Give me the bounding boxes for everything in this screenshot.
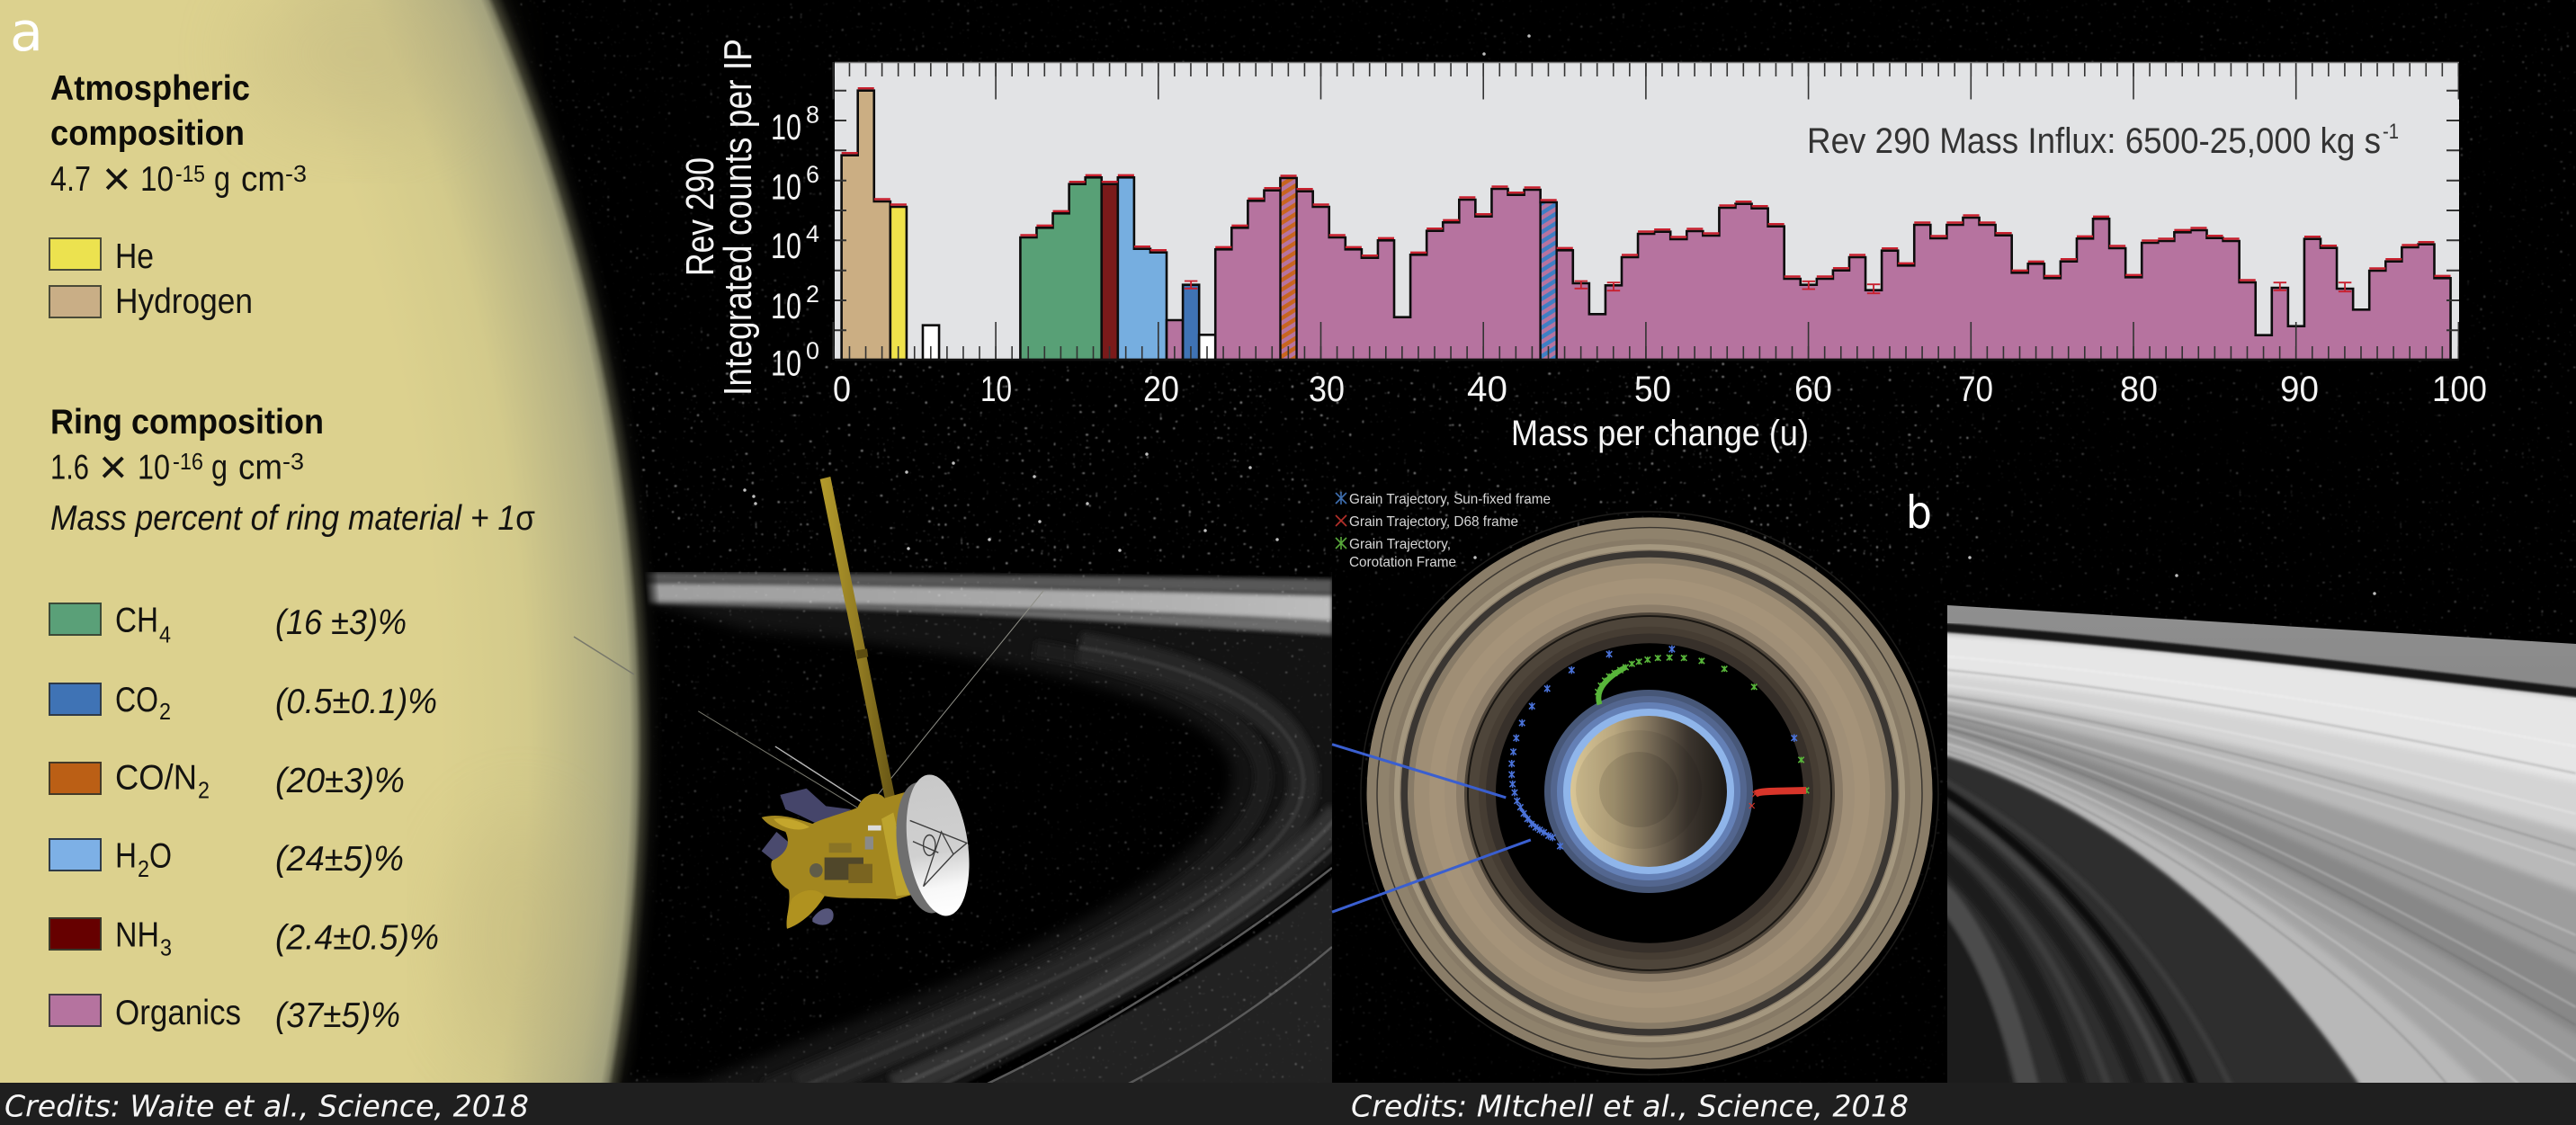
heading: ring composition bbox=[50, 403, 535, 538]
Cassini division bbox=[1934, 627, 2576, 694]
legend: grain trajectories: Grain Trajectory, Sun-fixed frame bbox=[1349, 492, 1551, 507]
CO/N2 row: CO/N bbox=[115, 759, 197, 797]
concentric rings bbox=[1361, 512, 1938, 1075]
y axis labels: 6 bbox=[806, 161, 819, 188]
NH3 row: NH bbox=[115, 916, 159, 955]
NH3 row: 3 bbox=[160, 934, 172, 961]
legend: grain trajectories: Grain Trajectory, D68 frame bbox=[1349, 514, 1518, 530]
Organics row: (37±5)% bbox=[275, 996, 400, 1035]
CH4 row bbox=[49, 601, 407, 648]
heading: ring composition: 1.6 bbox=[50, 449, 89, 487]
chart: Rev 290 mass spectrum bbox=[678, 39, 2487, 453]
x axis labels: 100 bbox=[2432, 370, 2487, 409]
outer lighter ring sector bbox=[988, 865, 1332, 1084]
y axis labels: 4 bbox=[806, 220, 819, 247]
CO2 row: CO bbox=[115, 681, 158, 719]
heading: atmospheric composition: × bbox=[103, 152, 131, 206]
plot background bbox=[835, 62, 2459, 360]
high-gain antenna dish bbox=[889, 779, 961, 917]
y axis labels: 10 bbox=[771, 344, 801, 384]
CO2 row: 2 bbox=[159, 698, 171, 725]
x axis labels bbox=[833, 370, 2487, 453]
y axis labels: 8 bbox=[806, 102, 819, 129]
equipment details bbox=[809, 826, 881, 883]
y axis labels: 10 bbox=[771, 287, 801, 326]
heading: atmospheric composition: 4.7 bbox=[50, 160, 91, 199]
annotation: mass influx: -1 bbox=[2383, 120, 2399, 144]
y axis labels: 10 bbox=[771, 108, 801, 147]
annotation: mass influx: Rev 290 Mass Influx: 6500-25,000 kg s bbox=[1807, 121, 2381, 161]
black ring interior bbox=[621, 594, 1232, 1084]
ring stripes bbox=[765, 647, 1340, 1088]
legend: grain trajectories: Grain Trajectory, bbox=[1349, 537, 1451, 552]
x axis labels: Mass per change (u) bbox=[1511, 414, 1809, 453]
x axis labels: 0 bbox=[833, 370, 851, 409]
axis ticks bbox=[833, 63, 2459, 360]
CH4 row: 4 bbox=[159, 621, 171, 648]
heading: atmospheric composition: 10 bbox=[140, 160, 174, 199]
Organics row: Organics bbox=[115, 994, 241, 1032]
heading: ring composition: g bbox=[211, 449, 228, 487]
x axis labels: 80 bbox=[2120, 370, 2158, 409]
heading: ring composition: cm bbox=[238, 449, 282, 487]
heading: atmospheric composition: -3 bbox=[285, 160, 307, 187]
heading: ring composition: Ring composition bbox=[50, 403, 324, 442]
CO/N2 row: 2 bbox=[198, 777, 210, 804]
heading: atmospheric composition: cm bbox=[241, 160, 285, 199]
hatched mixed bars bbox=[1281, 178, 1557, 360]
H2O row: (24±5)% bbox=[275, 840, 404, 879]
H2O row bbox=[49, 836, 404, 882]
spacecraft: Cassini bbox=[699, 477, 1043, 929]
x axis labels: 40 bbox=[1467, 370, 1507, 409]
heading: ring composition: -16 bbox=[173, 448, 203, 475]
x axis labels: 60 bbox=[1794, 370, 1832, 409]
NH3 row: (2.4±0.5)% bbox=[275, 918, 439, 957]
antennas bbox=[699, 591, 1043, 808]
x axis labels: 20 bbox=[1143, 370, 1179, 409]
NH3 row bbox=[49, 916, 439, 961]
heading: atmospheric composition: g bbox=[214, 160, 230, 199]
bright ring band bbox=[646, 572, 1332, 638]
x axis labels: 30 bbox=[1309, 370, 1345, 409]
heading: ring composition: × bbox=[99, 441, 128, 495]
planet shadow bands bbox=[1576, 730, 1678, 849]
magnetometer boom bbox=[820, 477, 899, 819]
heading: atmospheric composition: -15 bbox=[175, 160, 205, 187]
credits bar bbox=[0, 1083, 2576, 1125]
y axis labels: 0 bbox=[806, 337, 819, 364]
planet limb: Saturn atmosphere bbox=[0, 0, 720, 1084]
x axis labels: 90 bbox=[2280, 370, 2319, 409]
heading: ring composition: 10 bbox=[138, 449, 170, 487]
blue-grey engine parts bbox=[780, 789, 852, 826]
gold body bbox=[762, 791, 913, 929]
CO/N2 row bbox=[49, 759, 405, 804]
credit: Waite: Credits: Waite et al., Science, 2018 bbox=[4, 1089, 529, 1124]
panel label a: a bbox=[10, 1, 43, 64]
legend: ring species with mass percent bbox=[49, 601, 439, 1035]
H2O row: 2 bbox=[138, 855, 149, 882]
panel label b: b bbox=[1906, 487, 1932, 539]
dark ring grooves bbox=[1947, 780, 2232, 1083]
legend: atmospheric species bbox=[49, 237, 253, 321]
y axis labels: Rev 290 bbox=[678, 157, 722, 276]
ring streak lines bbox=[1947, 656, 2576, 1084]
blue pointer lines bbox=[1332, 745, 1531, 912]
credit: Mitchell: Credits: MItchell et al., Science, 2018 bbox=[1351, 1089, 1909, 1124]
Organics row bbox=[49, 994, 400, 1035]
y axis labels bbox=[678, 39, 819, 396]
CH4 row: (16 ±3)% bbox=[275, 603, 407, 642]
CO2 row: (0.5±0.1)% bbox=[275, 683, 437, 721]
heading: ring composition: -3 bbox=[282, 448, 304, 475]
CO/N2 row: (20±3)% bbox=[275, 762, 405, 800]
x axis labels: 50 bbox=[1634, 370, 1671, 409]
spherical atmosphere shells and planet bbox=[1544, 690, 1753, 893]
x axis labels: 70 bbox=[1958, 370, 1993, 409]
y axis labels: 10 bbox=[771, 168, 801, 208]
heading: atmospheric composition bbox=[50, 69, 307, 206]
heading: ring composition: Mass percent of ring material + 1σ bbox=[50, 499, 535, 538]
grain trajectory tracks bbox=[1512, 649, 1806, 846]
legend: atmospheric species: Hydrogen bbox=[115, 282, 253, 321]
x axis labels: 10 bbox=[980, 370, 1012, 409]
panel b: Saturn ring-plane diagram bbox=[1332, 492, 1947, 1083]
red measured values bbox=[842, 88, 2451, 293]
legend: atmospheric species: He bbox=[115, 237, 154, 276]
image: dark inner rings behind spacecraft bbox=[646, 572, 1332, 1083]
CO2 row bbox=[49, 681, 437, 725]
image: ring close-up, right bbox=[1947, 605, 2576, 1083]
H2O row: H bbox=[115, 836, 137, 876]
y axis labels: 10 bbox=[771, 227, 801, 266]
heading: atmospheric composition: Atmospheric bbox=[50, 69, 250, 108]
legend: grain trajectories: Corotation Frame bbox=[1349, 555, 1456, 570]
legend: grain trajectories bbox=[1336, 492, 1551, 570]
CH4 row: CH bbox=[115, 601, 158, 640]
y axis labels: 2 bbox=[806, 281, 819, 308]
H2O row: O bbox=[149, 836, 172, 876]
heading: atmospheric composition: composition bbox=[50, 114, 245, 153]
histogram bars bbox=[842, 91, 2451, 360]
